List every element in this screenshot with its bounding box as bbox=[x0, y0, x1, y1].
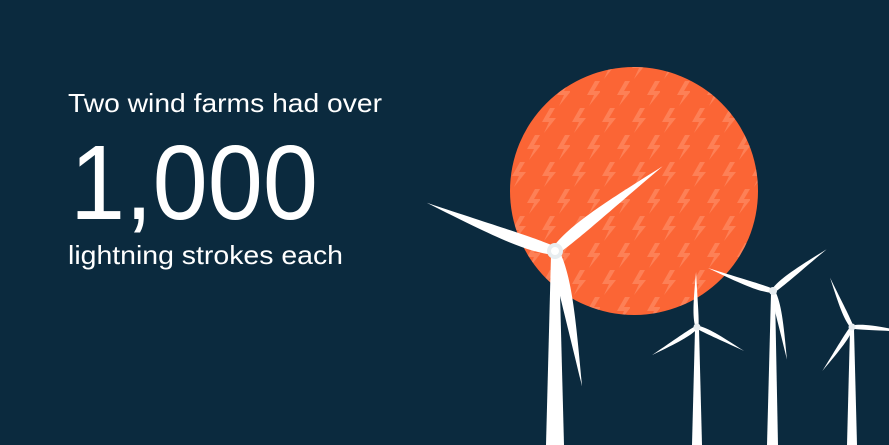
wind turbine: small 2 bbox=[707, 246, 828, 445]
orange sun with lightning pattern bbox=[510, 67, 758, 315]
wind turbine: small 3 bbox=[821, 277, 889, 445]
wind turbine: small 1 bbox=[651, 272, 746, 445]
heading text: Two wind farms had over bbox=[68, 88, 382, 118]
wind turbine: large bbox=[424, 160, 665, 445]
subheading text: lightning strokes each bbox=[68, 240, 343, 270]
big number: 1,000 bbox=[70, 124, 318, 242]
